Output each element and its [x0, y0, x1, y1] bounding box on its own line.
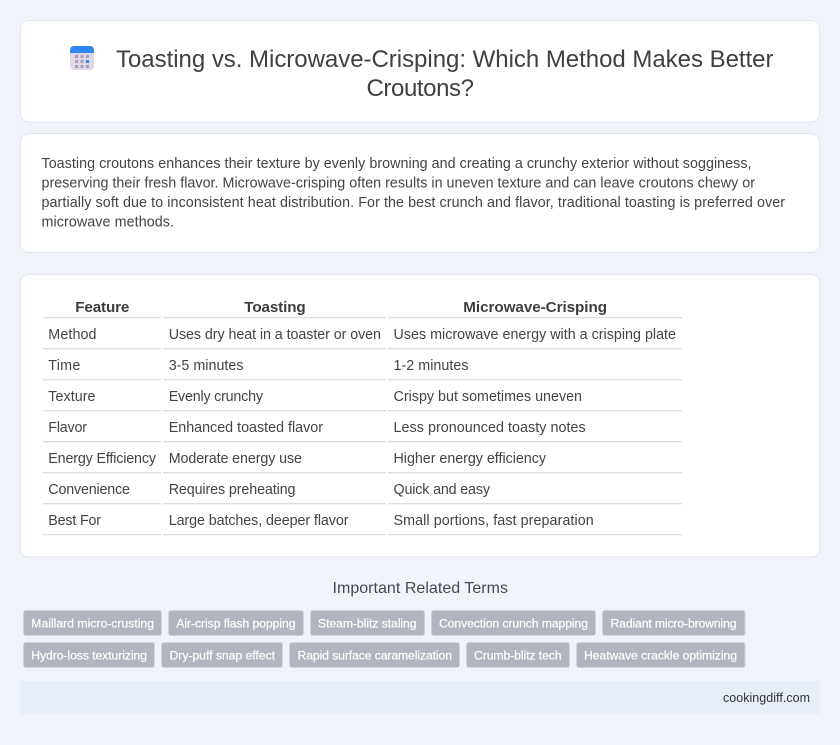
title: Croutons? [366, 75, 474, 102]
table row: time: 3-5 minutes [169, 358, 244, 374]
table row: convenience: Requires preheating [169, 482, 296, 498]
tag [24, 610, 162, 636]
table row: best for: Small portions, fast preparation [394, 513, 594, 529]
table row: texture [48, 389, 582, 405]
tag [162, 642, 282, 668]
table row: method: Uses dry heat in a toaster or oven [169, 327, 381, 343]
related term tags [24, 610, 745, 668]
table row: time [48, 358, 469, 374]
table row: convenience [48, 482, 491, 498]
footer bar [20, 681, 820, 714]
tag: Convection crunch mapping [439, 616, 588, 630]
title [116, 46, 774, 102]
tag: Dry-puff snap effect [170, 648, 276, 662]
table row: best for: Best For [48, 513, 101, 529]
heading: related terms: Important Related Terms [332, 580, 508, 597]
table row: method: Uses microwave energy with a crisping plate [394, 327, 676, 343]
tag [168, 610, 304, 636]
table row: texture: Texture [48, 389, 96, 405]
table row: flavor: Flavor [48, 420, 87, 436]
table row: convenience: Quick and easy [394, 482, 491, 498]
text block: summary: Toasting croutons enhances their texture by evenly browning and creating a crunchy exterior without sogginess, [42, 156, 752, 172]
table row: method: Method [48, 327, 97, 343]
tag: Radiant micro-browning [610, 616, 736, 630]
table row: texture: Crispy but sometimes uneven [394, 389, 582, 405]
table row: energy efficiency: Higher energy efficiency [394, 451, 547, 467]
table row: energy efficiency [48, 451, 547, 467]
table header row: Microwave-Crisping [463, 299, 607, 316]
tag [310, 610, 424, 636]
title: Toasting vs. Microwave-Crisping: Which Method Makes Better [116, 46, 774, 73]
text block: summary: partially soft due to inconsistent heat distribution. For the best crunch and flavor, traditional toasting is preferred over [42, 195, 785, 211]
table row: best for: Large batches, deeper flavor [169, 513, 349, 529]
table row: time: Time [48, 358, 80, 374]
text block: summary [42, 156, 785, 230]
tag: Heatwave crackle optimizing [584, 648, 737, 662]
table row: energy efficiency: Energy Efficiency [48, 451, 157, 467]
table row: method [48, 327, 676, 343]
tag [290, 642, 460, 668]
tag: Steam-blitz staling [318, 616, 416, 630]
table row: flavor: Enhanced toasted flavor [169, 420, 323, 436]
table row: texture: Evenly crunchy [169, 389, 264, 405]
table header row: Toasting [244, 299, 306, 316]
table row: energy efficiency: Moderate energy use [169, 451, 302, 467]
footer bar: cookingdiff.com [723, 691, 810, 705]
tag: Hydro-loss texturizing [31, 648, 147, 662]
panel: comparison table [20, 274, 820, 557]
tag: Crumb-blitz tech [474, 648, 562, 662]
panel: summary paragraph [20, 134, 820, 252]
table row: convenience: Convenience [48, 482, 130, 498]
text block: summary: preserving their fresh flavor. Microwave-crisping often results in uneven texture and can leave croutons chewy or [42, 176, 755, 192]
table row: flavor: Less pronounced toasty notes [394, 420, 586, 436]
tag [602, 610, 745, 636]
tag: Maillard micro-crusting [31, 616, 154, 630]
table header row: Feature [75, 299, 129, 316]
text block: summary: microwave methods. [42, 214, 174, 230]
icon: calendar [70, 46, 94, 70]
table header row [75, 299, 607, 316]
tag [432, 610, 596, 636]
tag [24, 642, 154, 668]
tag: Rapid surface caramelization [298, 648, 452, 662]
tag [466, 642, 570, 668]
table row: time: 1-2 minutes [394, 358, 468, 374]
table row: flavor [48, 420, 586, 436]
tag [576, 642, 745, 668]
panel: title header [20, 20, 820, 122]
tag: Air-crisp flash popping [176, 616, 296, 630]
table row: best for [48, 513, 594, 529]
